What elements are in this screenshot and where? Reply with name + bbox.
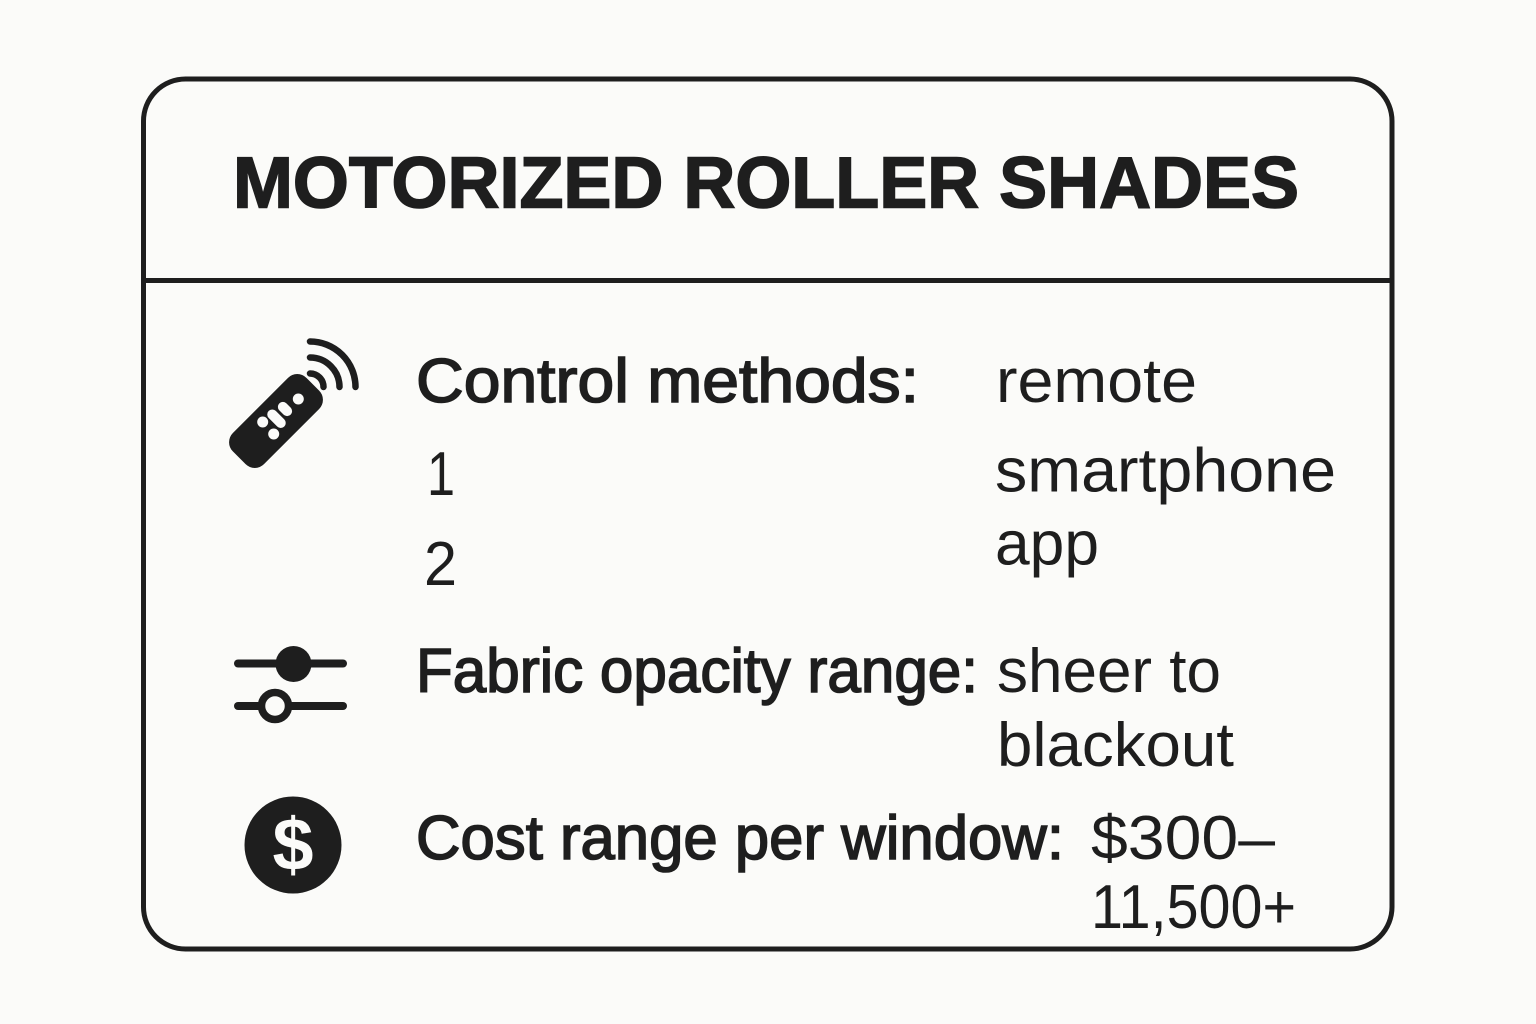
- icon: remote control with signal waves: [224, 342, 356, 473]
- icon: dollar coin: [244, 796, 342, 894]
- number 1: 1: [427, 440, 455, 509]
- value: remote: remote: [996, 347, 1197, 416]
- label: cost range per window: Cost range per window:: [416, 804, 1064, 873]
- value: app: app: [995, 510, 1099, 578]
- value: 11,500+: 11,500+: [1091, 873, 1296, 942]
- panel: motorized roller shades card: [144, 79, 1392, 949]
- value: blackout: blackout: [997, 711, 1234, 780]
- value: smartphone: smartphone: [995, 436, 1336, 506]
- icon: dollar coin: $: [272, 803, 314, 886]
- value: sheer to: sheer to: [997, 637, 1221, 706]
- label: control methods: Control methods:: [416, 347, 919, 416]
- icon: opacity sliders: [238, 646, 343, 720]
- number 2: 2: [424, 530, 457, 599]
- value: $300–: $300–: [1091, 804, 1276, 873]
- title: MOTORIZED ROLLER SHADES: [233, 144, 1299, 224]
- label: fabric opacity range: Fabric opacity range:: [416, 637, 978, 706]
